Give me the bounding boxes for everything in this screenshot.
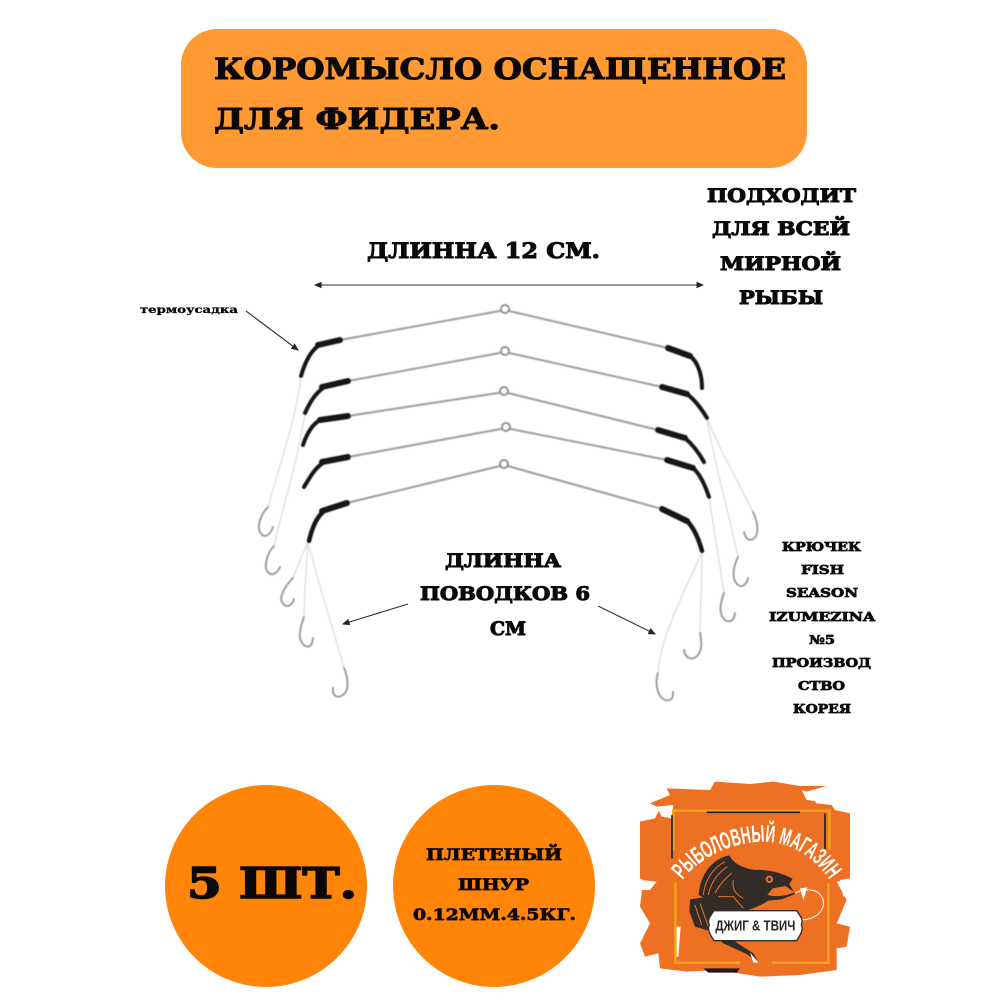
logo badge: ДЖИГ & ТВИЧ [715,919,795,935]
label: leader length: ПОВОДКОВ 6 [420,583,590,605]
label: hook and origin: IZUMEZINA [769,610,876,624]
label: hook and origin: КРЮЧЕК [782,540,861,554]
rig 1 [301,305,702,388]
fish [689,855,823,963]
logo splash gaps [640,790,850,957]
title panel [181,29,807,168]
arrow: width dimension [315,284,703,286]
leaders [268,376,753,673]
label: hook and origin: СТВО [798,679,845,693]
label: leader length: ДЛИННА [445,550,562,572]
arrow: left leader [343,604,408,624]
label: hook and origin: ПРОИЗВОД [772,656,871,670]
rig 5 [309,460,702,551]
label: heat shrink: термоусадка [140,304,238,316]
logo [640,782,850,977]
badge: braided line: ШНУР [458,875,529,894]
label: hook and origin: КОРЕЯ [793,702,851,716]
badge: braided line: ПЛЕТЕНЫЙ [426,843,562,864]
rigs illustration [259,305,757,700]
title text: КОРОМЫСЛО ОСНАЩЕННОЕ [214,52,786,86]
arrow: heat shrink [246,311,298,350]
rig 3 [303,387,704,462]
rig 4 [304,423,709,497]
label: suitable fish [707,185,856,309]
label: hook and origin: SEASON [786,586,858,600]
logo badge [709,911,802,941]
label: suitable fish: РЫБЫ [739,287,823,309]
arrow: right leader [598,606,655,634]
rig 2 [305,347,707,418]
label: leader length [420,550,590,640]
hooks [259,507,757,700]
label: suitable fish: ПОДХОДИТ [707,185,856,207]
label: leader length: СМ [490,618,526,640]
label: hook and origin: №5 [809,633,835,647]
badge: 5 pieces [165,785,367,987]
logo background splash [640,782,850,977]
label: length 12 cm: ДЛИННА 12 СМ. [367,238,600,263]
badge: 5 pieces: 5 ШТ. [187,859,357,908]
logo arc text: РЫБОЛОВНЫЙ МАГАЗИН [670,820,842,880]
label: suitable fish: ДЛЯ ВСЕЙ [712,216,850,240]
title text [214,52,786,136]
label: hook and origin [769,540,876,716]
badge: braided line [393,785,595,987]
badge: braided line: 0.12ММ.4.5КГ. [413,905,576,924]
label: suitable fish: МИРНОЙ [720,251,841,275]
title text: ДЛЯ ФИДЕРА. [214,102,500,136]
label: hook and origin: FISH [801,563,844,577]
logo frame [673,811,829,963]
